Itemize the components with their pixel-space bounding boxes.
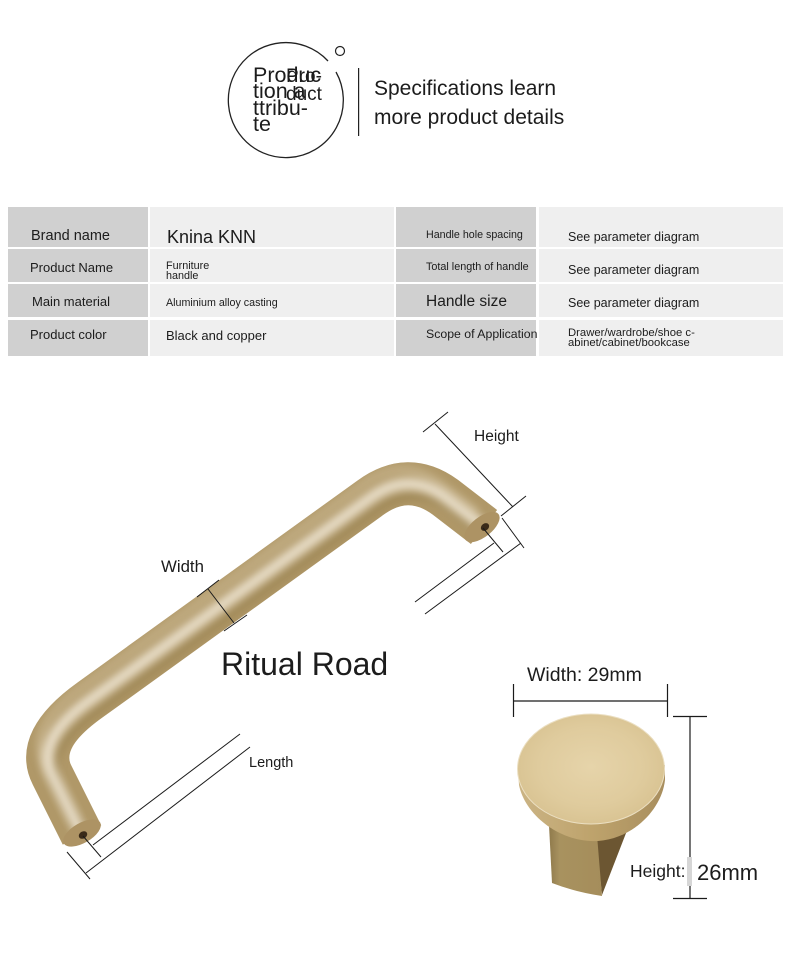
- row: color: Black and copper: [166, 328, 267, 343]
- row: product name: Furniture: [166, 260, 209, 272]
- row: color: Product color: [30, 327, 107, 342]
- row: product name: Total length of handle: [426, 261, 529, 273]
- badge title, overlapping lines: te: [253, 112, 271, 136]
- row: material: Handle size: [426, 293, 507, 310]
- badge title, overlapping lines: [253, 63, 323, 136]
- row: material: See parameter diagram: [568, 296, 699, 310]
- specification table: [8, 207, 783, 356]
- row: color: abinet/cabinet/bookcase: [568, 337, 690, 349]
- row: material: Aluminium alloy casting: [166, 297, 278, 309]
- row: brand: [8, 207, 783, 247]
- row: brand: Brand name: [31, 228, 110, 244]
- row: product name: Product Name: [30, 260, 113, 275]
- row: product name: [8, 249, 783, 282]
- badge title, overlapping lines: ttribu-: [253, 96, 308, 120]
- row: brand: Handle hole spacing: [426, 229, 523, 241]
- badge title, overlapping lines: duct: [286, 84, 323, 105]
- row: color: [8, 320, 783, 356]
- knob width dimension: [513, 664, 668, 717]
- knob height dimension: Height:: [630, 861, 685, 881]
- knob height dimension: [630, 716, 758, 899]
- knob width dimension: Width: 29mm: [527, 664, 642, 686]
- header text: Specifications learn: [374, 77, 556, 100]
- height dimension lines: [415, 412, 526, 614]
- brand caption: Ritual Road: [221, 646, 388, 682]
- knob stem shadow wedge: [595, 828, 628, 895]
- badge title, overlapping lines: Pro-: [286, 66, 322, 87]
- knob height dimension: 26mm: [697, 860, 758, 885]
- row: color: Scope of Application: [426, 327, 538, 341]
- label: width: Width: [161, 557, 204, 576]
- handle end face, left: [59, 814, 105, 852]
- row: material: Main material: [32, 294, 110, 309]
- header text: more product details: [374, 106, 564, 129]
- pull handle photo: [41, 470, 505, 852]
- knob stem: [549, 825, 602, 896]
- length dimension lines: [67, 734, 250, 879]
- row: brand: See parameter diagram: [568, 230, 699, 244]
- round knob photo: [518, 714, 665, 896]
- row: brand: Knina KNN: [167, 227, 256, 247]
- label: height: Height: [474, 428, 519, 445]
- circle badge: [228, 43, 344, 158]
- row: product name: See parameter diagram: [568, 263, 699, 277]
- width dimension lines: [197, 580, 247, 631]
- row: material: [8, 284, 783, 317]
- header divider: [358, 68, 359, 136]
- handle end face, right: [459, 506, 505, 548]
- badge title, overlapping lines: tion a: [253, 79, 306, 103]
- header: [228, 43, 564, 158]
- row: color: Drawer/wardrobe/shoe c-: [568, 327, 695, 339]
- knob rim: [518, 765, 665, 841]
- knob face: [518, 714, 664, 824]
- badge title, overlapping lines: Produc: [253, 63, 321, 87]
- header text: [374, 77, 564, 129]
- row: product name: handle: [166, 270, 198, 282]
- label: length: Length: [249, 755, 293, 771]
